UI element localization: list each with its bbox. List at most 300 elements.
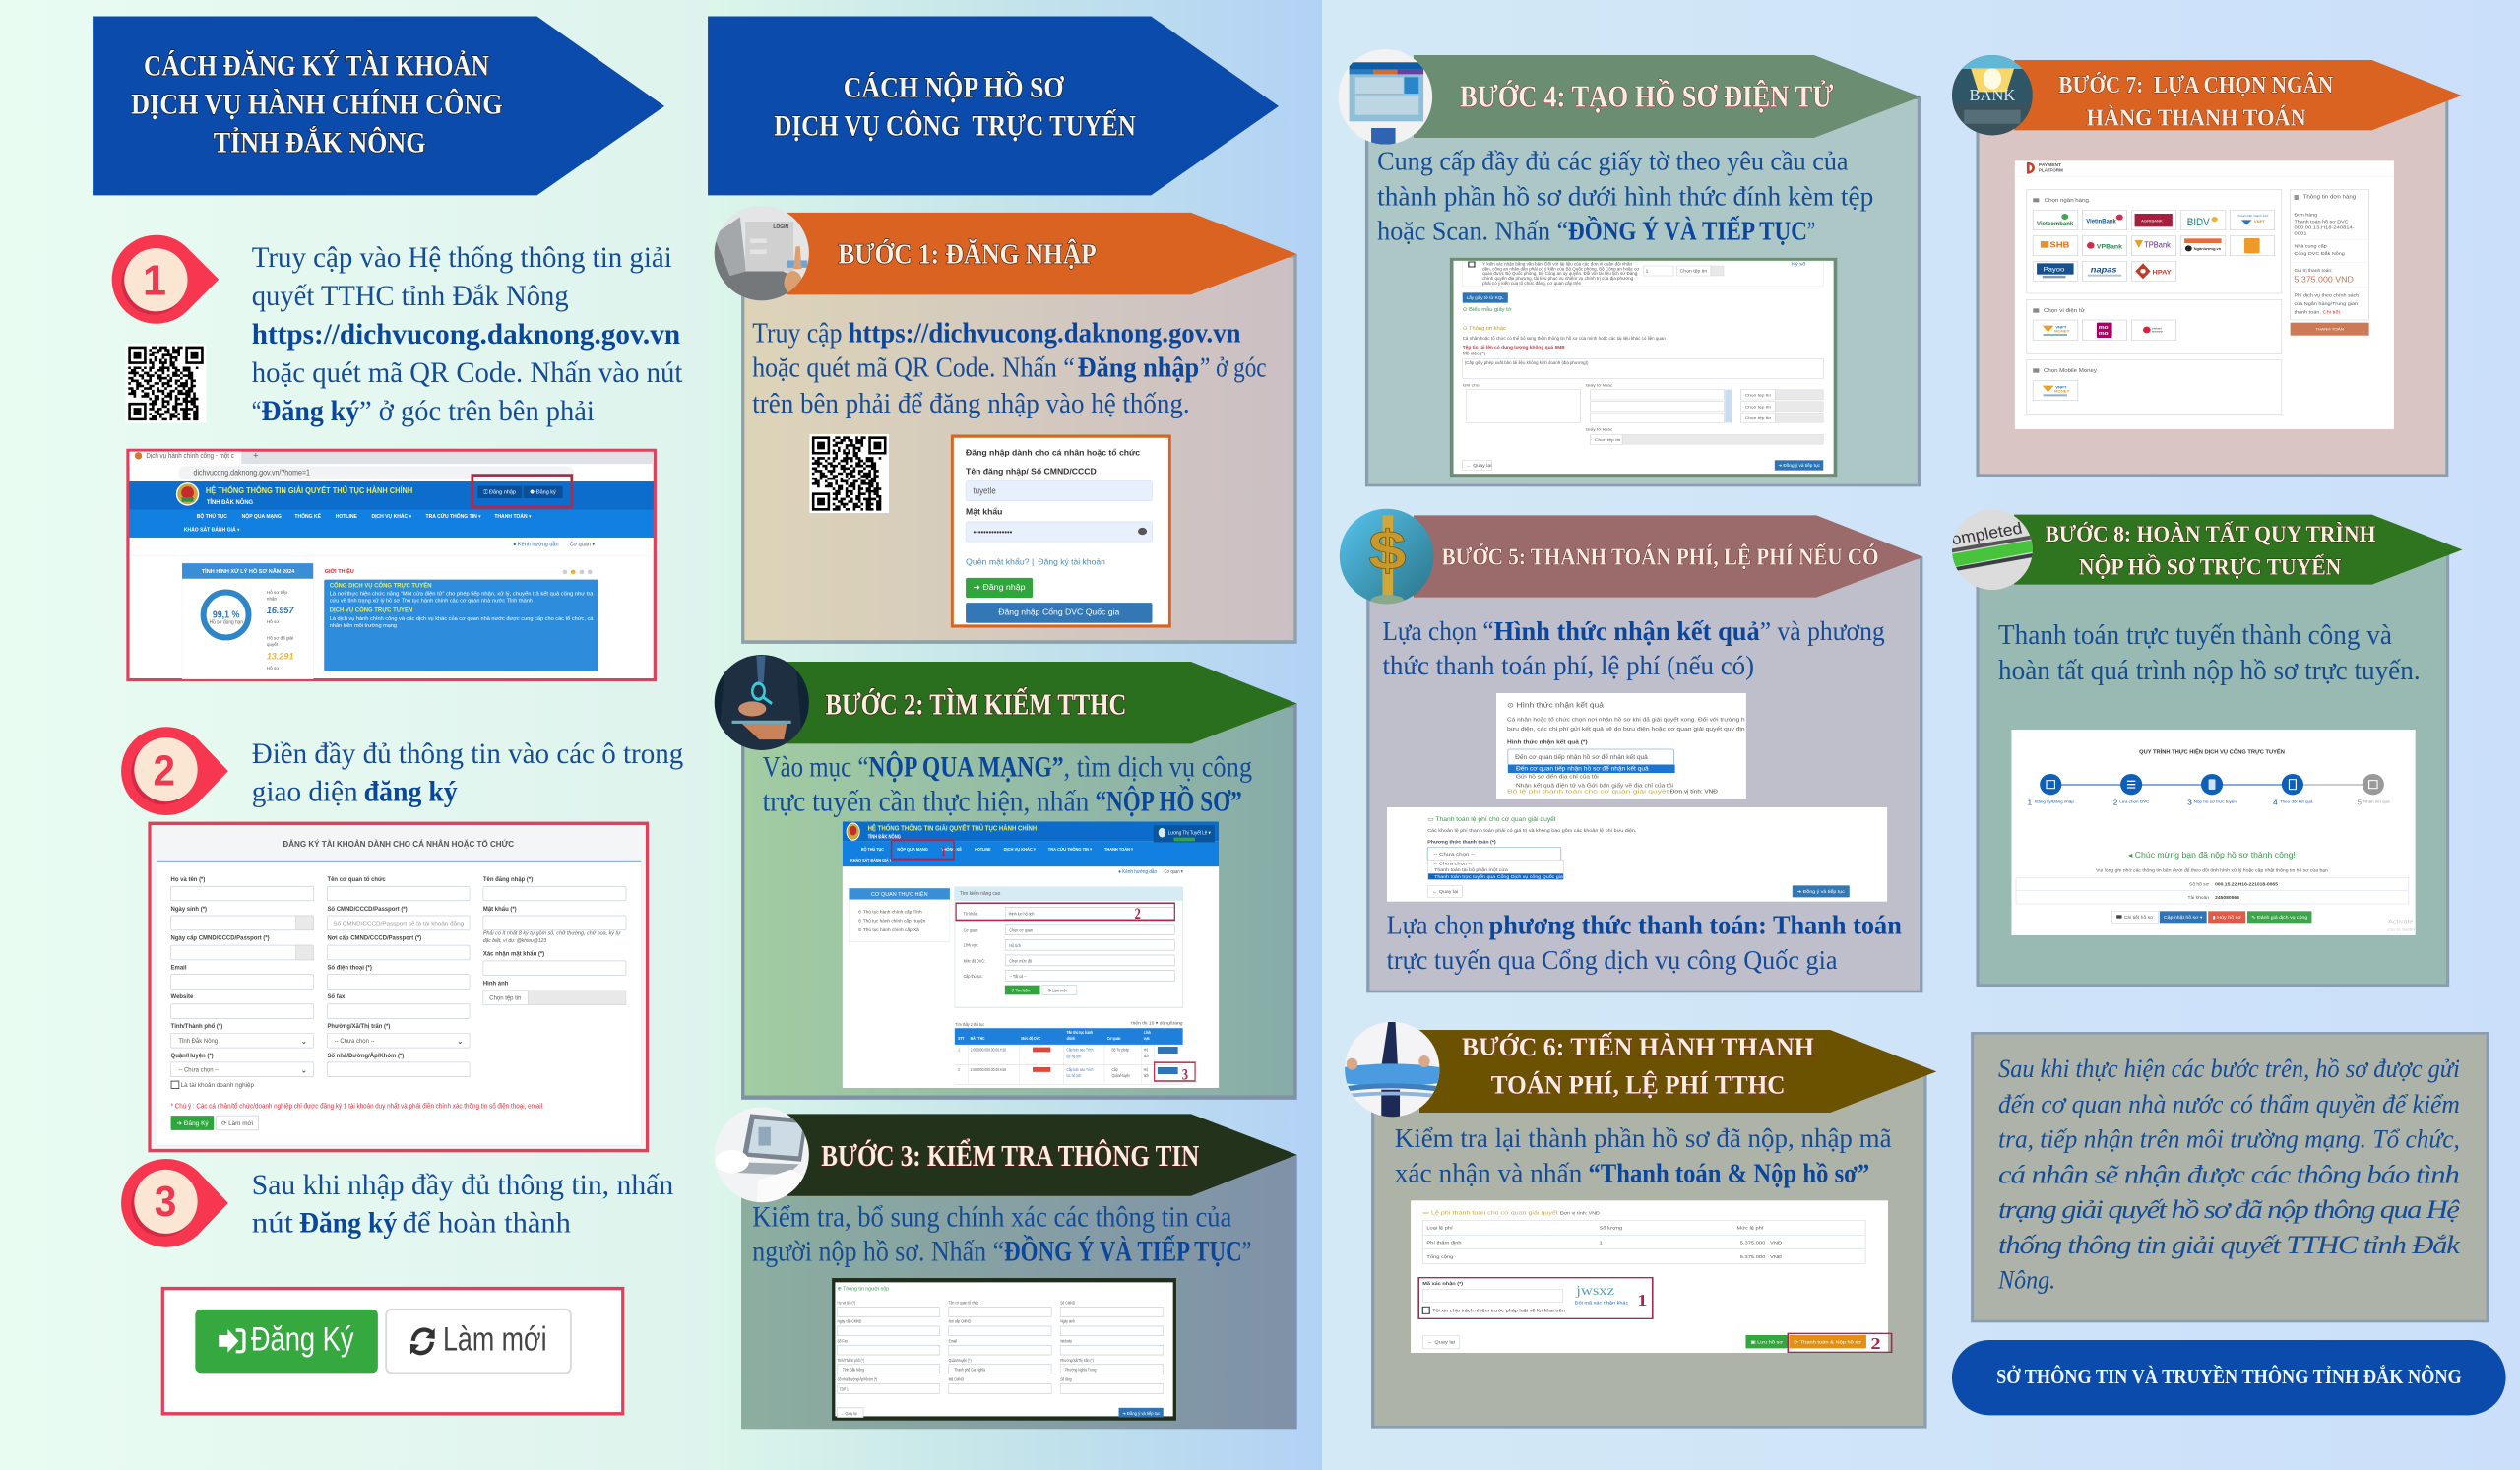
text block: step 6: [1395, 1123, 1892, 1188]
screenshot: attachments form: ⊙ Biểu mẫu giấy tờ: [1463, 305, 1512, 313]
process stepper: 5: [2357, 799, 2362, 806]
bank logo tiles: VNPT: [2254, 219, 2266, 224]
step 3 banner: BƯỚC 3: KIỂM TRA THÔNG TIN: [821, 1138, 1200, 1173]
screenshot: portal home page: Hồ sơ: [267, 666, 279, 671]
screenshot: search page: chính: [1066, 1037, 1076, 1041]
screenshot: search page: THỐNG KÊ: [941, 847, 962, 852]
screenshot: search page: Từ khóa:: [964, 911, 977, 917]
callout: closing note: trạng giải quyết hồ sơ đã nộp thông qua Hệ: [1998, 1195, 2460, 1224]
e-wallet logo tiles: MONEY: [2054, 329, 2070, 333]
screenshot: confirm and pay: Mã xác nhận (*): [1422, 1281, 1463, 1287]
screenshot: applicant form: Phường Nghĩa Trung: [1065, 1368, 1096, 1373]
screenshot: completion page with stepper: Go to Settin: [2388, 927, 2416, 932]
screenshot: search page: Hộ tịch: [1009, 942, 1022, 948]
order summary: Đơn hàng: [2294, 213, 2317, 218]
text block: step 1 instructions: https://dichvucong.daknong.gov.vn: [252, 319, 680, 351]
screenshot: search page: Cấp: [1111, 1067, 1118, 1072]
callout: closing note: [1973, 1033, 2488, 1321]
screenshot: registration form: Nơi cấp CMND/CCCD/Passport (*): [327, 934, 421, 942]
screenshot: registration form: Ngày cấp CMND/CCCD/Passport (*): [171, 934, 270, 942]
text block: step 3 instructions: [252, 1169, 674, 1240]
screenshot: result delivery selector: Cá nhân hoặc tổ chức chọn nơi nhận hồ sơ khi đã giải quyết xong. Đối với trường h: [1507, 715, 1745, 723]
icon: dollar photo: [1339, 509, 1434, 607]
screenshot: applicant form: TDP 1: [840, 1387, 849, 1392]
step 4 banner: [1414, 55, 1921, 138]
text block: step 5 payment method: trực tuyến qua Cổng dịch vụ công Quốc gia: [1387, 945, 1838, 975]
screenshot: search page: TỈNH ĐẮK NÔNG: [868, 832, 901, 841]
screenshot: completion page with stepper: 245080565: [2215, 895, 2239, 900]
mobile money logo tile: MONEY: [2054, 389, 2070, 393]
screenshot: search page: STT: [958, 1037, 965, 1041]
screenshot: search page: TRA CỨU THÔNG TIN ▾: [1048, 847, 1093, 852]
order summary: Thông tin đơn hàng: [2303, 195, 2356, 201]
order summary: Giá trị thanh toán:: [2294, 268, 2332, 274]
screenshot: portal home page: HỆ THỐNG THÔNG TIN GIẢI QUYẾT THỦ TỤC HÀNH CHÍNH: [206, 485, 413, 495]
text block: step 2 search: trực tuyến cần thực hiện, nhấn: [763, 785, 1089, 817]
screenshot: portal home page: ⚉ Đăng ký: [530, 488, 556, 495]
screenshot: attachments form: Chọn tệp tin: [1680, 269, 1708, 274]
text block: step 3 instructions: nút: [252, 1207, 293, 1240]
screenshot: applicant form: Số Fax: [837, 1339, 848, 1344]
screenshot: search page: ⊙ Thủ tục hành chính cấp Xã: [858, 927, 919, 932]
screenshot: search page: CƠ QUAN THỰC HIỆN: [871, 889, 928, 898]
screenshot: attachments form: Chọn tệp tin: [1745, 393, 1772, 398]
icon: process board photo: [1339, 48, 1433, 146]
icon: completed photo: [1949, 509, 2033, 590]
screenshot: applicant form: Số nhà/Đường/Ấp/Khóm (*): [837, 1377, 878, 1382]
screenshot: registration form: Quận/Huyện (*): [171, 1053, 214, 1059]
icon: laptop photo: [714, 1106, 811, 1206]
screenshot: search page: Hộ: [1144, 1067, 1148, 1072]
screenshot: search page: 2.000000.000.00.00.H16: [971, 1067, 1006, 1072]
text block: step 5 payment method: phương thức thanh toán: Thanh toán: [1489, 910, 1902, 940]
step 1 banner: [787, 213, 1297, 294]
screenshot: confirm and pay: Loại lệ phí: [1426, 1226, 1453, 1231]
screenshot: search page: Cấp bản sao Trích: [1066, 1048, 1093, 1052]
screenshot: result delivery selector: Hình thức nhận kết quả (*): [1507, 738, 1588, 745]
panel: step 4 create e-dossier: [1339, 48, 1921, 485]
screenshot: portal home page: DỊCH VỤ KHÁC ▾: [371, 513, 412, 520]
step 7 banner: BƯỚC 7: LỰA CHỌN NGÂN: [2058, 72, 2334, 98]
screenshot: registration form: Mật khẩu (*): [483, 906, 517, 913]
text block: step 4: ”: [1807, 216, 1815, 246]
screenshot: portal home page: GIỚI THIỆU: [325, 567, 354, 575]
text block: step 3 check information: người nộp hồ sơ. Nhấn “: [752, 1234, 1004, 1267]
screenshot: confirm and pay: Đơn vị tính: VNĐ: [1560, 1211, 1600, 1216]
screenshot: portal home page: DỊCH VỤ CÔNG TRỰC TUYẾN: [330, 607, 412, 614]
icon: step marker 2: [121, 727, 228, 815]
screenshot: search page: Cấp bản sao Trích: [1066, 1067, 1093, 1072]
screenshot: applicant form: Ngày cấp CMND: [837, 1319, 861, 1324]
screenshot: registration form: ⟳ Làm mới: [221, 1120, 253, 1127]
screenshot: search page: ● Kênh hướng dẫn: [1118, 868, 1157, 875]
screenshot: portal home page: nhân trên môi trường mạng: [330, 623, 397, 629]
icon: dollar photo: $: [1368, 520, 1407, 582]
process stepper: 3: [2187, 799, 2192, 806]
screenshot: search page: Chọn cơ quan: [1009, 927, 1033, 932]
screenshot: register and reset buttons: Làm mới: [443, 1321, 547, 1359]
screenshot: confirm and pay: 5.375.000 VNĐ: [1740, 1241, 1782, 1246]
screenshot: attachments form: Mô việc (*): [1463, 352, 1486, 356]
screenshot: login card: Đăng nhập dành cho cá nhân hoặc tổ chức: [966, 448, 1141, 457]
screenshot: registration form: Phường/Xã/Thị trấn (*): [327, 1023, 390, 1030]
screenshot: registration form: Họ và tên (*): [171, 876, 205, 883]
text block: step 2 search: NỘP QUA MẠNG”: [868, 750, 1064, 783]
screenshot: portal home page: Là nơi thực hiện chức năng “Một cửa điện tử” cho phép tiếp nhận, xử lý, chuyển trả kết quả cũng như tra: [330, 591, 594, 598]
screenshot: applicant form: ← Quay lại: [841, 1411, 857, 1416]
screenshot: applicant form: Website: [1060, 1339, 1072, 1344]
screenshot: applicant form: Ngày sinh: [1060, 1319, 1075, 1324]
screenshot: payment method selector: -- Chưa chọn --: [1433, 862, 1473, 866]
text block: step 5 result method: [1382, 616, 1885, 680]
screenshot: portal home page: [128, 450, 655, 680]
heading arrow: account registration: TỈNH ĐẮK NÔNG: [214, 126, 426, 160]
process stepper: Đăng ký/Đăng nhập: [2035, 799, 2075, 804]
process stepper: 4: [2273, 799, 2278, 806]
screenshot: portal home page: THANH TOÁN ▾: [494, 513, 532, 520]
screenshot: search page: ⚲ Tìm kiếm: [1011, 988, 1031, 993]
screenshot: portal home page: TỈNH ĐẮK NÔNG: [207, 498, 253, 506]
screenshot: search page: Lĩnh vực:: [964, 942, 978, 948]
screenshot: search page: Quận/Huyện: [1111, 1074, 1130, 1078]
text block: step 2 instructions: giao diện: [252, 776, 358, 808]
screenshot: registration form: Số CMND/CCCD/Passport (*): [327, 906, 408, 913]
screenshot: portal home page: Hồ sơ đúng hạn: [210, 620, 243, 626]
text block: step 1 login: Đăng nhập: [1078, 352, 1199, 383]
heading arrow: online filing: CÁCH NỘP HỒ SƠ: [844, 71, 1065, 104]
screenshot: portal home page: CỔNG DỊCH VỤ CÔNG TRỰC TUYẾN: [330, 581, 432, 589]
screenshot: completion page with stepper: Cập nhật hồ sơ ▾: [2164, 915, 2203, 920]
screenshot: portal home page: Cơ quan ▾: [570, 543, 595, 548]
screenshot: login card: Quên mật khẩu? |: [966, 557, 1034, 567]
icon: step marker 2: 2: [153, 746, 175, 795]
screenshot: search page: 3: [1182, 1066, 1188, 1084]
screenshot: registration form: ⌄: [301, 1037, 307, 1046]
order summary: [2291, 190, 2369, 336]
heading arrow: online filing: DỊCH VỤ CÔNG TRỰC TUYẾN: [774, 110, 1136, 143]
icon: step marker 3: [121, 1159, 228, 1247]
screenshot: portal home page: ● Kênh hướng dẫn: [513, 542, 559, 548]
step 8 banner: [2014, 515, 2463, 585]
screenshot: completion page with stepper: Tài khoản: [2188, 895, 2209, 900]
screenshot: search page: Hộ: [1144, 1048, 1148, 1052]
e-wallet logo tiles: VNPT: [2055, 325, 2067, 329]
screenshot: payment method selector: ➜ Đồng ý và tiếp tục: [1797, 889, 1845, 895]
screenshot: applicant form: Phường/Xã/Thị trấn (*): [1060, 1359, 1094, 1363]
screenshot: registration form: Website: [171, 993, 194, 1000]
heading arrow: account registration: DỊCH VỤ HÀNH CHÍNH CÔNG: [131, 89, 503, 121]
screenshot: confirm and pay: Phí thẩm định: [1426, 1240, 1462, 1246]
screenshot: portal home page: +: [253, 451, 259, 461]
screenshot: attachments form: Chọn tệp tin: [1745, 415, 1772, 420]
screenshot: applicant form: Thành phố Gia Nghĩa: [954, 1368, 986, 1373]
bank logo tiles: VietinBank: [2086, 219, 2116, 225]
screenshot: confirm and pay: ← Quay lại: [1427, 1340, 1455, 1345]
screenshot: applicant form: Tỉnh Đắk Nông: [843, 1367, 864, 1373]
mobile money logo tile: [2033, 380, 2078, 401]
screenshot: portal home page: 16.957: [267, 606, 294, 615]
text block: step 3 check information: ĐỒNG Ý VÀ TIẾP TỤC: [1004, 1233, 1242, 1267]
icon: search photo: [714, 655, 811, 751]
screenshot: search page: tịch: [1144, 1074, 1149, 1078]
screenshot: payment platform: Chọn ngân hàng: [2045, 197, 2089, 204]
callout: closing note: thống thông tin giải quyết TTHC tỉnh Đắk: [1998, 1231, 2461, 1259]
text block: step 1 instructions: Truy cập vào Hệ thống thông tin giải: [252, 242, 672, 274]
screenshot: portal home page: ⚿ Đăng nhập: [483, 489, 516, 495]
screenshot: search page: 2: [958, 1067, 960, 1072]
text block: step 1 instructions: quyết TTHC tỉnh Đắk Nông: [252, 281, 569, 312]
step 5 banner: [1414, 515, 1922, 598]
order summary: Cổng DVC Đắk Nông: [2294, 250, 2345, 257]
panel: account registration column top: [93, 17, 682, 680]
text block: step 1 instructions: Đăng ký: [261, 396, 359, 427]
step 5 banner: BƯỚC 5: THANH TOÁN PHÍ, LỆ PHÍ NẾU CÓ: [1441, 543, 1879, 570]
screenshot: search page: Cơ quan ▾: [1165, 869, 1183, 875]
screenshot: search page: HOTLINE: [975, 847, 991, 852]
screenshot: search page: Lương Thị Tuyết Lê ▾: [1168, 830, 1211, 837]
screenshot: registration form: Số fax: [327, 993, 346, 1000]
bank logo tiles: Payoo: [2044, 266, 2064, 274]
screenshot: login card: Đăng ký tài khoản: [1038, 557, 1105, 567]
text block: step 2 search: “NỘP HỒ SƠ”: [1095, 784, 1242, 817]
screenshot: registration form: Xác nhận mật khẩu (*): [483, 950, 544, 958]
screenshot: registration form: ⌄: [457, 1037, 463, 1046]
screenshot: registration form: Số nhà/Đường/Ấp/Khóm (*): [327, 1053, 404, 1059]
screenshot: register and reset buttons: Đăng Ký: [251, 1321, 354, 1359]
screenshot: applicant form: Số CMND: [1060, 1301, 1075, 1306]
text block: step 1 instructions: [252, 242, 682, 427]
screenshot: attachments form: quan được Bộ Quốc phòng, Bộ Công an ủy quyền. Đối với tài liệu lịch sử Đảng,: [1482, 271, 1638, 277]
step 2 banner: [787, 662, 1297, 743]
screenshot: login card: [952, 436, 1169, 626]
screenshot: confirm and pay: Số lượng: [1599, 1226, 1622, 1231]
screenshot: portal home page: TRA CỨU THÔNG TIN ▾: [426, 512, 481, 520]
process stepper: Nhận kết quả: [2363, 799, 2391, 804]
screenshot: registration form: Là tài khoản doanh nghiệp: [181, 1082, 255, 1089]
text block: step 4: hoặc Scan. Nhấn “: [1377, 216, 1568, 246]
screenshot: portal home page: Dịch vụ hành chính công - một c: [146, 453, 234, 460]
screenshot: result delivery selector: [1496, 693, 1746, 799]
screenshot: search page: Cơ quan: [1107, 1037, 1121, 1041]
bank logo tiles: Ngânlượng.vn: [2194, 246, 2222, 251]
panel: online filing heading and step 1: [708, 17, 1297, 642]
step 7 banner: HÀNG THANH TOÁN: [2087, 104, 2306, 131]
screenshot: completion page with stepper: [2011, 730, 2416, 935]
text block: step 2 search: [763, 750, 1252, 817]
text block: step 6: “Thanh toán & Nộp hồ sơ”: [1588, 1159, 1869, 1188]
screenshot: search page: Cơ quan:: [964, 927, 978, 932]
text block: step 3 instructions: để hoàn thành: [403, 1207, 571, 1240]
e-wallet logo tiles: mo: [2099, 330, 2109, 337]
text block: step 4: thành phần hồ sơ dưới hình thức đính kèm tệp: [1377, 181, 1873, 212]
panel: step 6 make payment: [1343, 1021, 1936, 1427]
screenshot: portal home page: TÌNH HÌNH XỬ LÝ HỒ SƠ NĂM 2024: [202, 567, 295, 575]
icon: step marker 3: 3: [155, 1178, 176, 1225]
screenshot: portal home page: THỐNG KÊ: [294, 512, 322, 520]
callout: closing note: Nông.: [1997, 1265, 2055, 1295]
screenshot: search page: 1: [941, 844, 946, 859]
screenshot: confirm and pay: jwsxz: [1575, 1283, 1614, 1299]
text block: step 2 search: Vào mục “: [763, 750, 868, 783]
order summary: Phí dịch vụ theo chính sách: [2294, 293, 2359, 298]
order summary: THANH TOÁN: [2315, 327, 2344, 331]
screenshot: applicant form: Email: [949, 1339, 957, 1344]
text block: step 5 result method: thức thanh toán phí, lệ phí (nếu có): [1382, 651, 1754, 680]
text block: step 3 check information: [752, 1199, 1251, 1267]
icon: login photo: [714, 206, 811, 303]
screenshot: attachments form: Tệp tin tải lên có dung lượng không quá 5MB: [1463, 345, 1565, 351]
screenshot: result delivery selector: bưu điện, các chi phí gửi kết quả sẽ do bưu điện hoặc cơ quan giải quyết quy địn: [1507, 725, 1745, 733]
screenshot: registration form: ⌄: [301, 1065, 307, 1075]
screenshot: login card: ➜ Đăng nhập: [974, 583, 1026, 592]
screenshot: search page: Chọn mức độ: [1009, 958, 1033, 964]
text block: step 4: [1377, 147, 1873, 246]
screenshot: attachments form: Ghi chú: [1463, 383, 1480, 387]
screenshot: search page: Mức độ DVC: [1021, 1037, 1040, 1041]
screenshot: confirm and pay: ▣ Lưu hồ sơ: [1750, 1340, 1784, 1345]
screenshot: payment platform: Chọn Mobile Money: [2044, 367, 2098, 374]
screenshot: result delivery selector: ⊙ Hình thức nhận kết quả: [1507, 701, 1604, 709]
heading arrow: account registration: CÁCH ĐĂNG KÝ TÀI KHOẢN: [144, 50, 489, 83]
screenshot: attachments form: phải có ý kiến của tổ chức đảng, cơ quan cấp trên: [1482, 281, 1581, 287]
screenshot: result delivery selector: Gửi hồ sơ đến địa chỉ của tôi: [1516, 772, 1599, 780]
screenshot: search page: 2.000000.000.00.00.H16: [971, 1048, 1006, 1052]
screenshot: payment method selector: Thanh toán tại bộ phận một cửa: [1434, 867, 1508, 873]
screenshot: attachments form: Chọn tệp tin: [1745, 405, 1772, 409]
text block: step 8: [1998, 619, 2421, 685]
text block: step 6: xác nhận và nhấn: [1395, 1159, 1582, 1188]
icon: bank photo: BANK: [1970, 86, 2016, 105]
screenshot: registration form: * Chú ý : Các cá nhân/tổ chức/doanh nghiệp chỉ được đăng ký 1 tài khoản duy nhất và phải điền chính xác thông tin số điện thoại, email.: [171, 1101, 544, 1111]
screenshot: attachments form: ← Quay lại: [1466, 463, 1492, 469]
screenshot: confirm and pay: Tôi xin chịu trách nhiệm trước pháp luật về lời khai trên: [1432, 1309, 1565, 1313]
screenshot: search page: Bộ Tư pháp: [1111, 1048, 1129, 1052]
screenshot: register and reset buttons: [162, 1289, 623, 1414]
text block: step 5 payment method: [1387, 910, 1902, 975]
screenshot: search page: NỘP QUA MẠNG: [897, 847, 929, 852]
text block: step 5 result method: ” và phương: [1760, 616, 1885, 646]
screenshot: completion page with stepper: QUY TRÌNH THỰC HIỆN DỊCH VỤ CÔNG TRỰC TUYẾN: [2139, 748, 2285, 756]
step 8 banner: NỘP HỒ SƠ TRỰC TUYẾN: [2079, 553, 2341, 580]
heading arrow: online filing: [708, 17, 1279, 195]
screenshot: payment method selector: -- Chưa chọn --: [1433, 852, 1475, 858]
screenshot: registration form: Ngày sinh (*): [171, 906, 207, 913]
screenshot: portal home page: 13.291: [267, 651, 293, 661]
text block: step 1 login: Truy cập: [752, 317, 842, 349]
screenshot: search page: thịnh lục hộ tịch: [1009, 911, 1035, 917]
screenshot: attachments form: [1452, 259, 1835, 476]
panel: step 5 payment of fees: [1339, 509, 1922, 991]
footer pill: department name: [1952, 1340, 2506, 1415]
text block: step 3 instructions: Đăng ký: [299, 1207, 398, 1240]
screenshot: confirm and pay: 1: [1637, 1292, 1647, 1310]
screenshot: completion page with stepper: ✎ Đánh giá dịch vụ công: [2251, 915, 2308, 920]
panel: step 3 check information: [714, 1106, 1297, 1429]
screenshot: search page: Cấp thủ tục:: [964, 974, 983, 979]
screenshot: payment method selector: ▭ Thanh toán lệ phí cho cơ quan giải quyết: [1427, 815, 1557, 823]
screenshot: search page: BỘ THỦ TỤC: [861, 847, 884, 852]
screenshot: portal home page: nhận: [267, 596, 278, 601]
screenshot: attachments form: Ký số: [1792, 262, 1805, 267]
text block: step 2 instructions: đăng ký: [364, 776, 458, 808]
screenshot: applicant form: Số tầng: [1060, 1377, 1072, 1382]
screenshot: payment platform: PLATFORM: [2039, 168, 2063, 173]
screenshot: portal home page: Hồ sơ: [267, 619, 279, 624]
step 6 banner: [1419, 1030, 1936, 1113]
screenshot: applicant form: Họ và tên (*): [837, 1301, 856, 1306]
step 4 banner: BƯỚC 4: TẠO HỒ SƠ ĐIỆN TỬ: [1460, 78, 1834, 114]
screenshot: search page: Mức độ DVC:: [964, 958, 985, 964]
bank logo tiles: SHB: [2049, 240, 2070, 250]
screenshot: portal home page: 99,1 %: [213, 610, 239, 621]
screenshot: registration form: Số điện thoại (*): [327, 965, 372, 972]
process stepper: Lựa chọn DVC: [2119, 799, 2150, 804]
screenshot: applicant form: ⊕ Thông tin người nộp: [837, 1286, 889, 1293]
order summary: Nhà cung cấp: [2294, 244, 2327, 249]
text block: step 1 login: https://dichvucong.daknong.gov.vn: [849, 317, 1240, 349]
text block: step 1 login: trên bên phải để đăng nhập vào hệ thống.: [752, 388, 1190, 418]
screenshot: completion page with stepper: Vui lòng ghi nhớ các thông tin bên dưới để theo dõi tình hình xử lý hoặc cập nhật thông tin hồ sơ của bạn: [2096, 867, 2328, 872]
text block: step 8: hoàn tất quá trình nộp hồ sơ trực tuyến.: [1998, 655, 2421, 686]
screenshot: completion page with stepper: 000.15.22.H16-221018-0065: [2215, 882, 2278, 887]
screenshot: confirm and pay: Đổi mã xác nhận khác: [1575, 1300, 1629, 1306]
screenshot: portal home page: cứu về tình trạng xử lý hồ sơ Thủ tục hành chính các cơ quan nhà nước Tỉnh thành: [330, 598, 533, 605]
screenshot: payment method selector: Thanh toán trực tuyến qua Cổng Dịch vụ công Quốc gia: [1434, 874, 1563, 880]
screenshot: search page: Tìm thấy 2 thủ tục: [955, 1022, 985, 1027]
screenshot: payment platform: Chọn ví điện tử: [2044, 307, 2085, 314]
text block: step 5 result method: Hình thức nhận kết quả: [1494, 616, 1760, 646]
order summary: của Ngân hàng/Trung gian: [2294, 300, 2358, 307]
icon: completed photo: ompleted: [1949, 519, 2024, 548]
e-wallet logo tiles: money: [2152, 330, 2163, 334]
screenshot: login card: Đăng nhập Cổng DVC Quốc gia: [998, 607, 1120, 617]
screenshot: registration form: Tên đăng nhập (*): [483, 876, 533, 883]
screenshot: registration form: ➜ Đăng Ký: [177, 1120, 210, 1127]
screenshot: registration form: đặc biệt, ví dụ: @khieu@123: [483, 938, 546, 944]
process stepper: Nộp hồ sơ trực tuyến: [2194, 799, 2236, 804]
bank logo tiles: BIDV: [2187, 216, 2210, 228]
screenshot: portal home page: dichvucong.daknong.gov.vn/?home=1: [194, 469, 310, 478]
step 3 banner: [787, 1114, 1297, 1196]
screenshot: attachments form: ⊙ Thông tin khác: [1463, 326, 1506, 332]
bank logo tiles: napas: [2091, 265, 2117, 275]
text block: step 1 login: ” ở góc: [1200, 352, 1267, 383]
screenshot: search page: DỊCH VỤ KHÁC ▾: [1004, 847, 1037, 852]
text block: step 1 login: [752, 317, 1267, 418]
screenshot: completion page with stepper: Activate: [2388, 919, 2414, 926]
screenshot: search page: 1: [958, 1048, 960, 1052]
process stepper: 1: [2028, 799, 2032, 806]
screenshot: search page: HỆ THỐNG THÔNG TIN GIẢI QUYẾT THỦ TỤC HÀNH CHÍNH: [868, 824, 1038, 833]
text block: step 8: Thanh toán trực tuyến thành công và: [1998, 619, 2392, 651]
screenshot: applicant form: Mã CMND: [949, 1377, 964, 1382]
mobile money logo tile: VNPT: [2055, 385, 2067, 390]
text block: step 1 instructions: “: [252, 396, 261, 427]
screenshot: search page: -- Tất cả --: [1009, 974, 1027, 979]
screenshot: payment method selector: ← Quay lại: [1432, 889, 1458, 895]
text block: step 1 login: hoặc quét mã QR Code. Nhấn “: [752, 352, 1075, 383]
process stepper: [2028, 774, 2391, 806]
text block: step 2 instructions: Điền đầy đủ thông tin vào các ô trong: [252, 737, 683, 770]
screenshot: confirm and pay: 5.375.000 VNĐ: [1740, 1254, 1782, 1260]
screenshot: payment platform: PAYMENT: [2039, 162, 2062, 168]
screenshot: search page: [843, 821, 1219, 1088]
screenshot: registration form: Số CMND/CCCD/Passport sẽ là tài khoản đăng: [333, 921, 464, 927]
screenshot: search page: Lĩnh: [1144, 1031, 1151, 1035]
screenshot: applicant form: Tên cơ quan tổ chức: [949, 1301, 978, 1306]
screenshot: search page: Tên thủ tục hành: [1066, 1031, 1094, 1035]
screenshot: search page: 2: [1135, 905, 1141, 923]
